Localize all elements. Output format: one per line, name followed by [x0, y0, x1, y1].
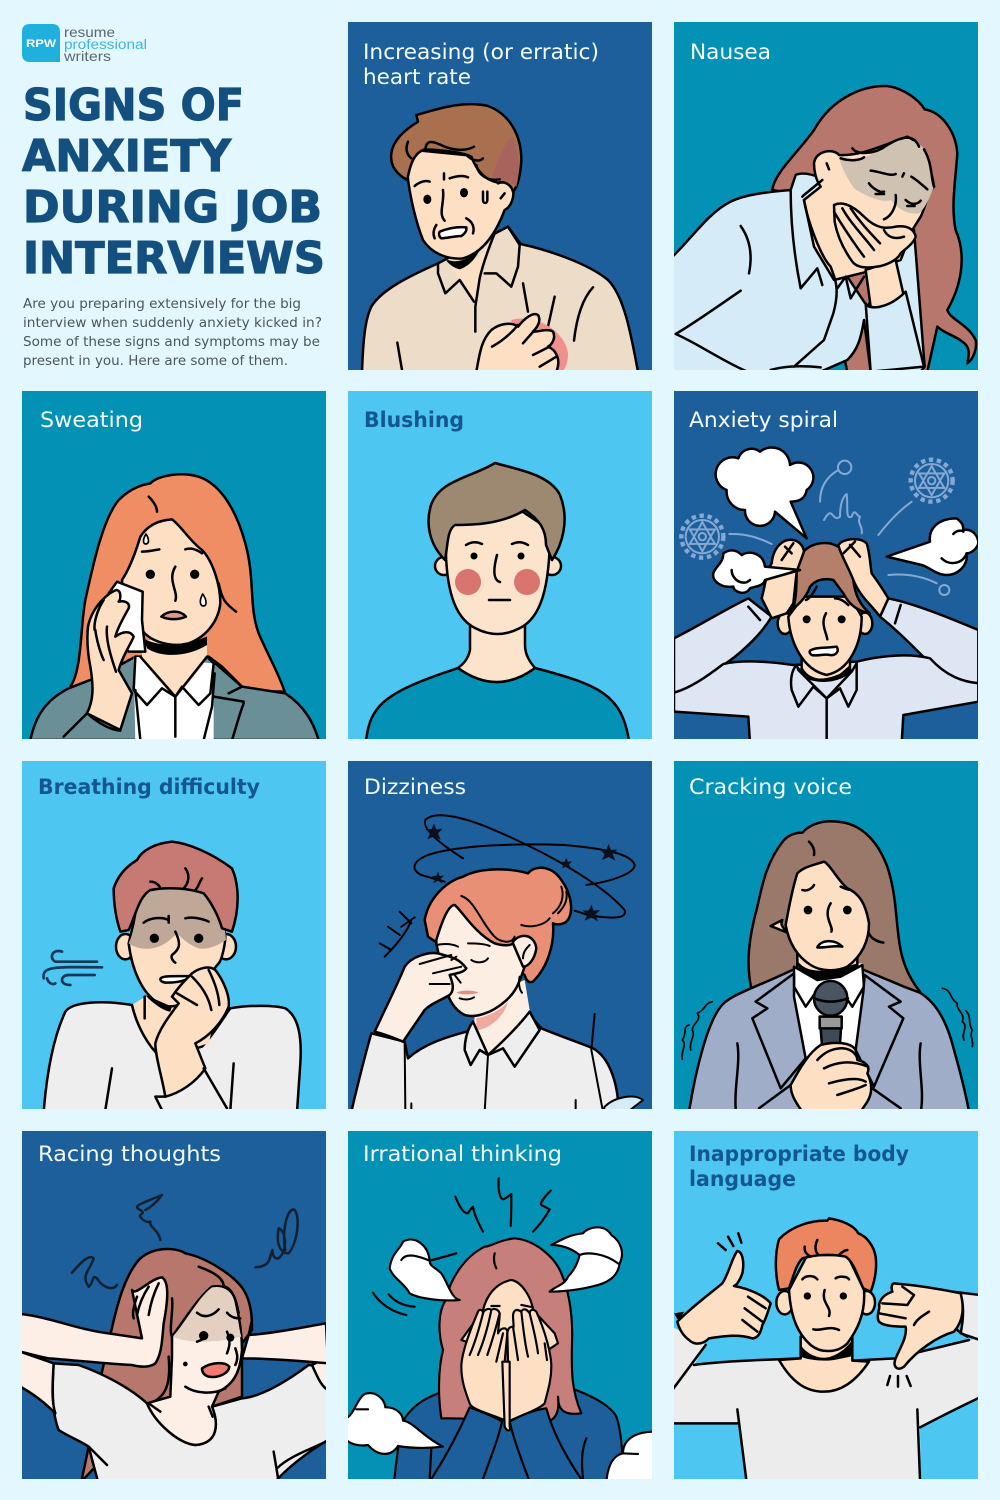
illustration: woman covering mouth [672, 86, 976, 372]
panel: inappropriate body language [672, 1131, 980, 1482]
intro text: Are you preparing extensively for the big [23, 297, 301, 312]
panel: cracking voice [674, 761, 978, 1112]
heading: increasing heart rate: Increasing (or erratic) [363, 40, 599, 64]
heading: irrational thinking: Irrational thinking [363, 1142, 562, 1166]
panel: breathing difficulty [22, 761, 326, 1112]
intro text [23, 297, 322, 369]
illustration: woman wiping sweat [30, 474, 319, 743]
panel: dizziness [348, 761, 652, 1112]
panel: nausea [672, 22, 978, 372]
heading: inappropriate body language [689, 1142, 909, 1191]
heading: dizziness: Dizziness [364, 775, 466, 799]
illustration: woman feeling dizzy [351, 815, 643, 1112]
intro text: present in you. Here are some of them. [23, 354, 288, 369]
illustration: man with thumbs up and down [672, 1218, 980, 1482]
illustration: man with red cheeks [366, 463, 629, 741]
panel: racing thoughts [20, 1131, 328, 1482]
logo: resume professional writers: writers [63, 48, 111, 64]
illustration: woman with microphone [682, 821, 973, 1112]
heading: inappropriate body language: language [689, 1167, 796, 1191]
title: SIGNS OF [23, 80, 244, 131]
heading: blushing: Blushing [364, 408, 464, 432]
heading: sweating: Sweating [40, 408, 143, 432]
heading: increasing heart rate [363, 40, 599, 89]
heading: cracking voice: Cracking voice [689, 775, 852, 799]
logo: resume professional writers: resume [64, 24, 115, 40]
heading: nausea: Nausea [690, 40, 771, 64]
illustration: man struggling to breathe [43, 842, 301, 1112]
title: INTERVIEWS [23, 233, 325, 284]
heading: racing thoughts: Racing thoughts [38, 1142, 221, 1166]
title [22, 80, 325, 284]
title: ANXIETY [22, 131, 232, 182]
panel: irrational thinking [346, 1131, 654, 1482]
panel: blushing [348, 391, 652, 741]
illustration: man clutching chest [362, 104, 638, 372]
illustration: woman covering face with clouds [346, 1178, 654, 1482]
title: DURING JOB [23, 182, 322, 233]
logo: resume professional writers [22, 24, 147, 64]
intro text: interview when suddenly anxiety kicked in? [23, 316, 322, 331]
logo: resume professional writers: RPW [26, 38, 57, 50]
panel: anxiety spiral [674, 391, 978, 743]
intro text: Some of these signs and symptoms may be [23, 335, 320, 350]
heading: breathing difficulty: Breathing difficulty [38, 775, 260, 799]
heading: increasing heart rate: heart rate [363, 65, 471, 89]
heading: anxiety spiral: Anxiety spiral [689, 408, 838, 432]
illustration: man holding head with gears and clouds [674, 447, 978, 743]
illustration: woman covering ears [20, 1195, 328, 1482]
logo: resume professional writers: professional [64, 36, 147, 52]
panel: sweating [22, 391, 326, 743]
panel: increasing heart rate [348, 22, 652, 372]
heading: inappropriate body language: Inappropriate body [689, 1142, 909, 1166]
